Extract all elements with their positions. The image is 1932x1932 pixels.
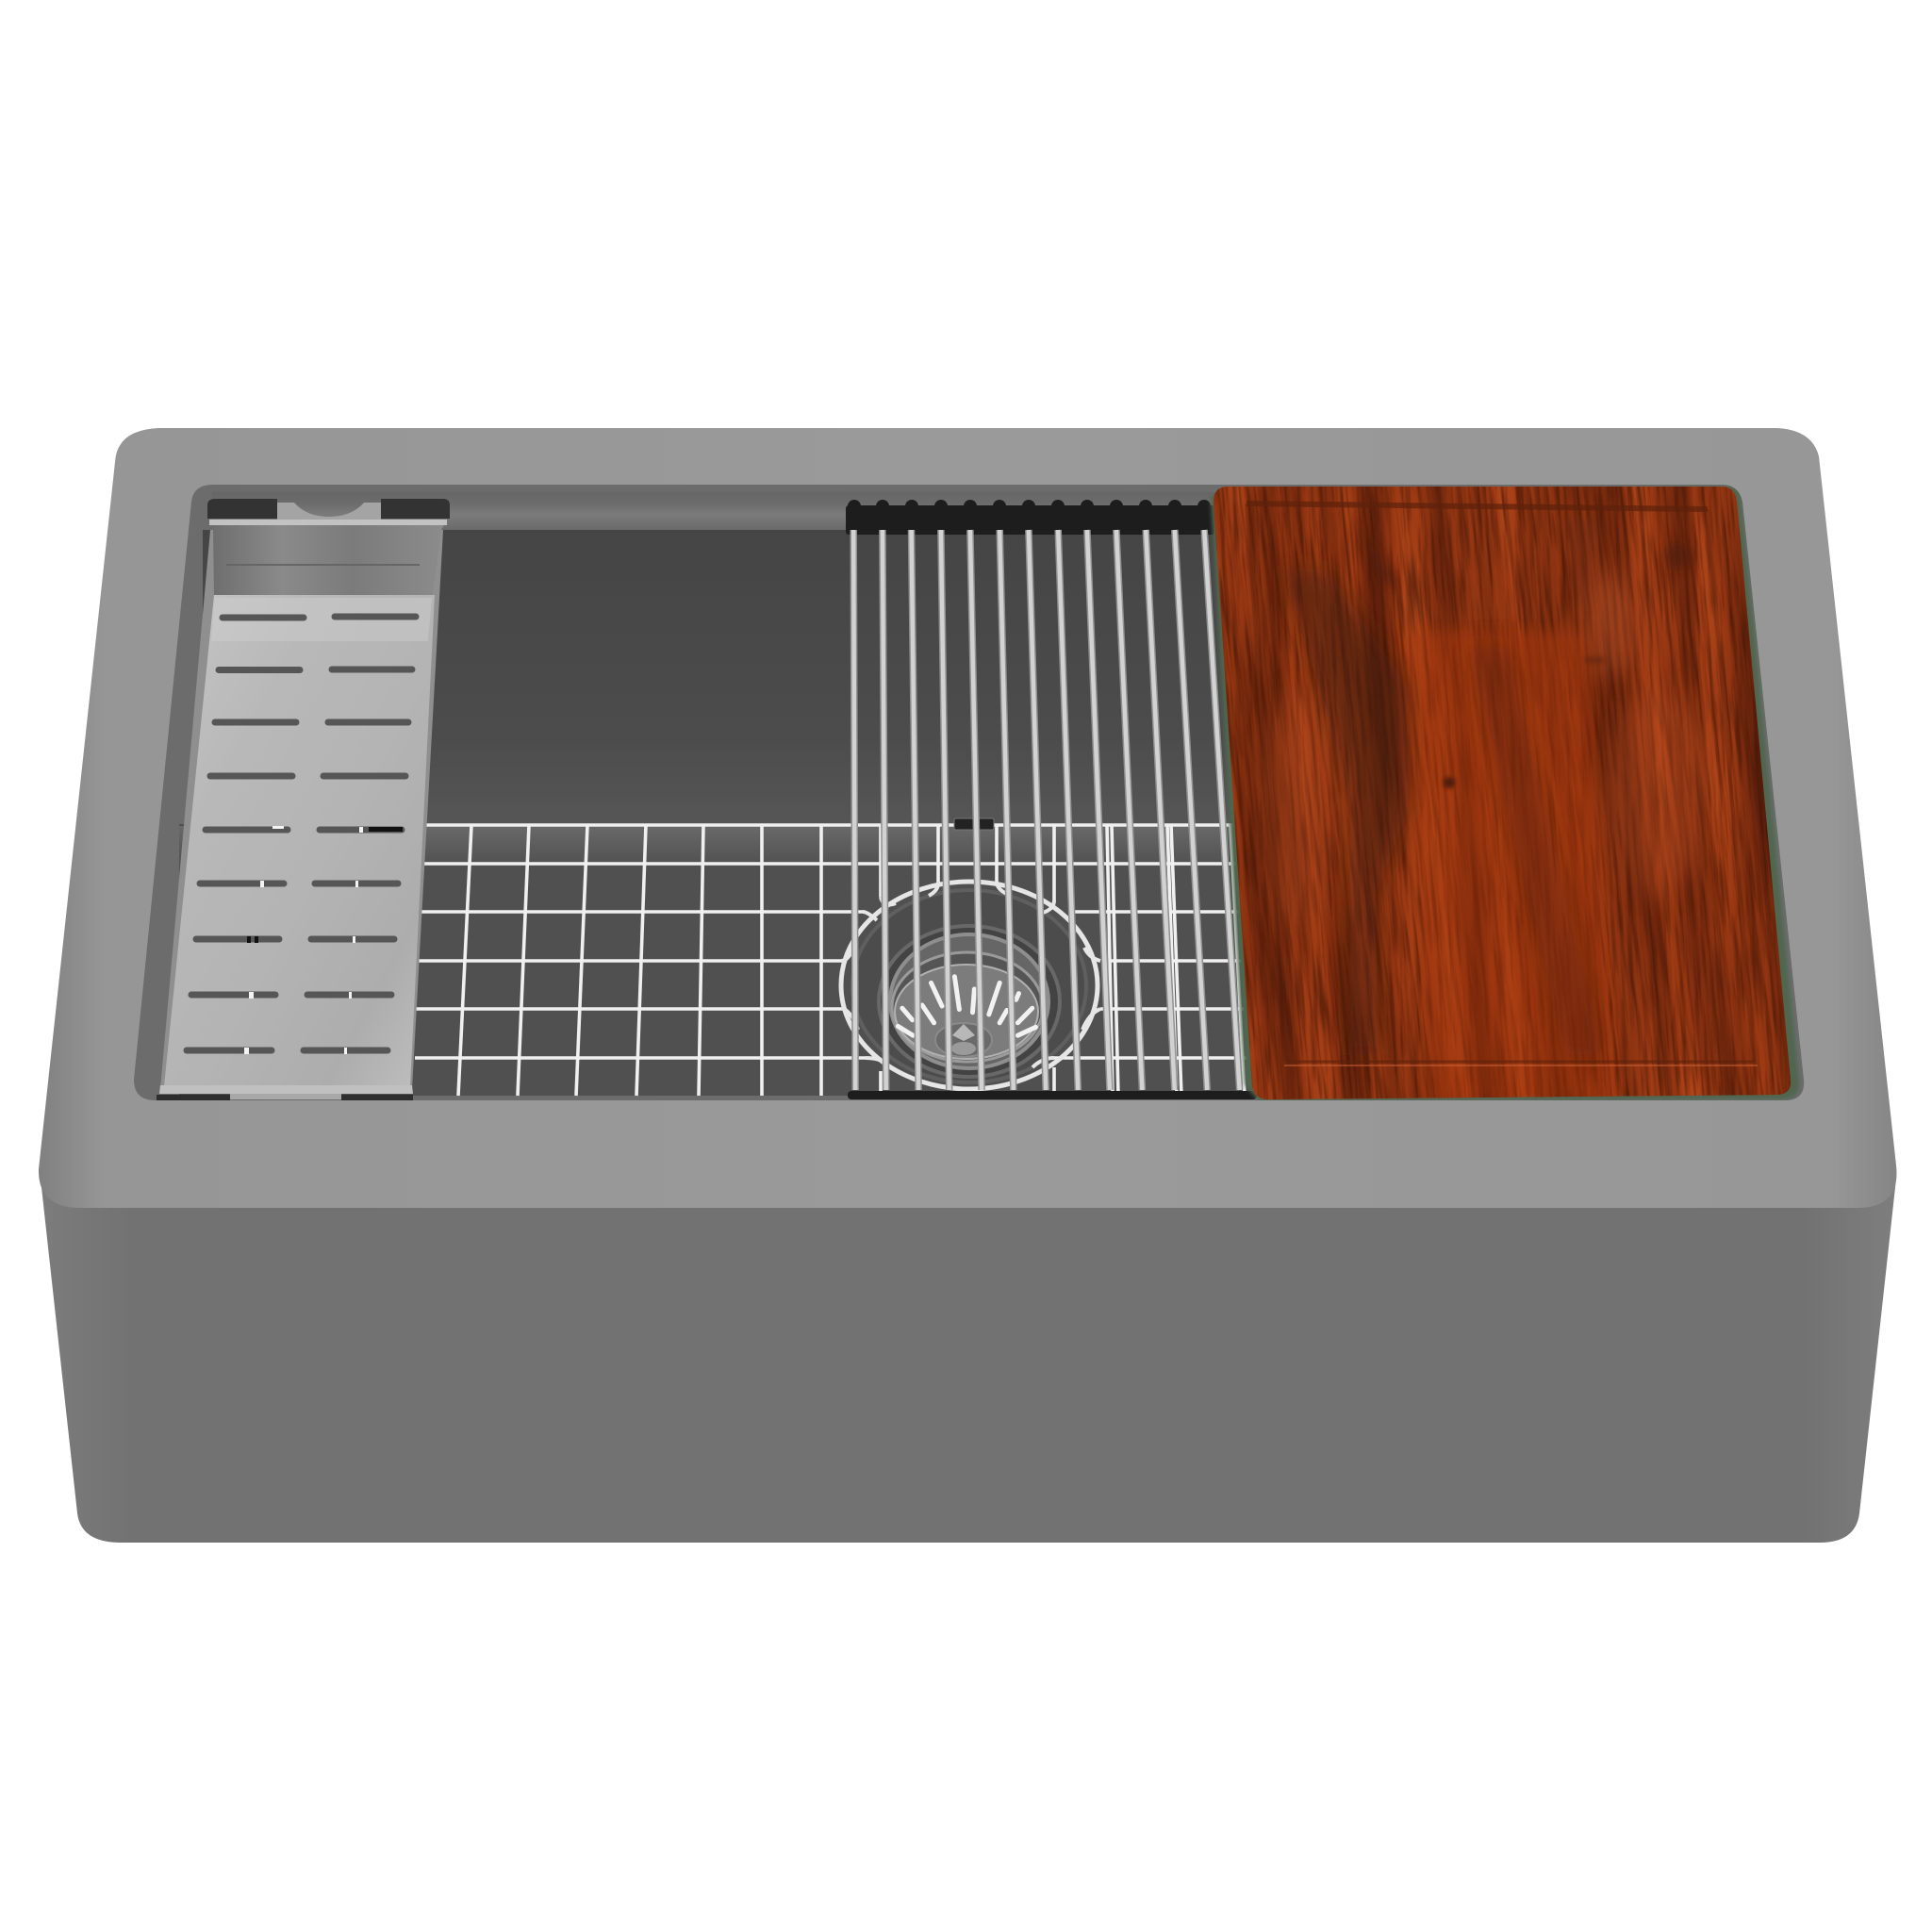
wood knots bbox=[1664, 541, 1689, 570]
light grain areas bbox=[1588, 568, 1633, 677]
back ledge bbox=[212, 509, 846, 520]
roll-up drying rack bbox=[846, 500, 1257, 1099]
grid horizontals bbox=[415, 825, 1268, 1058]
drain bowl bbox=[852, 890, 1086, 1082]
board side edge shadow bbox=[1211, 487, 1799, 1101]
basin opening bbox=[134, 485, 1804, 1100]
cutting board bbox=[1209, 486, 1801, 1100]
black clip on grid bbox=[954, 818, 994, 830]
tray back tabs bbox=[207, 499, 450, 519]
floor shadow band bbox=[179, 826, 1273, 864]
sink front apron bbox=[41, 1131, 1896, 1543]
tray top rim bbox=[209, 520, 447, 525]
tray back wall bbox=[212, 521, 446, 595]
wire ring around drain bbox=[841, 882, 1098, 1089]
strainer knob bbox=[935, 1023, 992, 1057]
grid rack bbox=[415, 825, 1268, 1096]
tray bottom rim bbox=[159, 1085, 413, 1094]
tray body bbox=[160, 530, 443, 1089]
juice groove sides bbox=[1247, 504, 1754, 1062]
fine grain lines bbox=[1214, 487, 1791, 1099]
wood plank tints bbox=[1405, 632, 1614, 1103]
sink illustration bbox=[39, 428, 1897, 1543]
juice groove bottom bbox=[1287, 1060, 1754, 1064]
rack rods shadow side bbox=[853, 530, 1240, 1090]
rack rods highlight bbox=[853, 530, 1240, 1090]
tray bottom tabs bbox=[157, 1095, 413, 1100]
slot glints bbox=[244, 826, 363, 1054]
basin floor bbox=[179, 824, 1273, 1096]
wood grain bbox=[1214, 487, 1792, 1099]
rack bottom rubber bar bbox=[848, 1091, 1257, 1099]
tray handle bbox=[277, 503, 381, 521]
drain bbox=[841, 882, 1100, 1089]
strainer slots bbox=[898, 977, 1035, 1035]
rack top rubber bar bbox=[846, 500, 1214, 536]
dark grain streaks bbox=[1279, 566, 1409, 1055]
juice groove top bbox=[1247, 504, 1708, 509]
sink top rim bbox=[39, 428, 1896, 1208]
tray front handle bbox=[230, 1094, 341, 1099]
basin back wall bbox=[203, 530, 1240, 826]
grid verticals bbox=[458, 825, 1245, 1096]
tray brushed highlight bbox=[211, 598, 432, 641]
colander tray bbox=[157, 499, 450, 1100]
tray floor bbox=[164, 595, 435, 1086]
strainer flange bbox=[890, 934, 1049, 1068]
tray slots bbox=[187, 617, 416, 1050]
slot dark specks bbox=[247, 827, 403, 943]
strainer basket bbox=[895, 965, 1038, 1059]
